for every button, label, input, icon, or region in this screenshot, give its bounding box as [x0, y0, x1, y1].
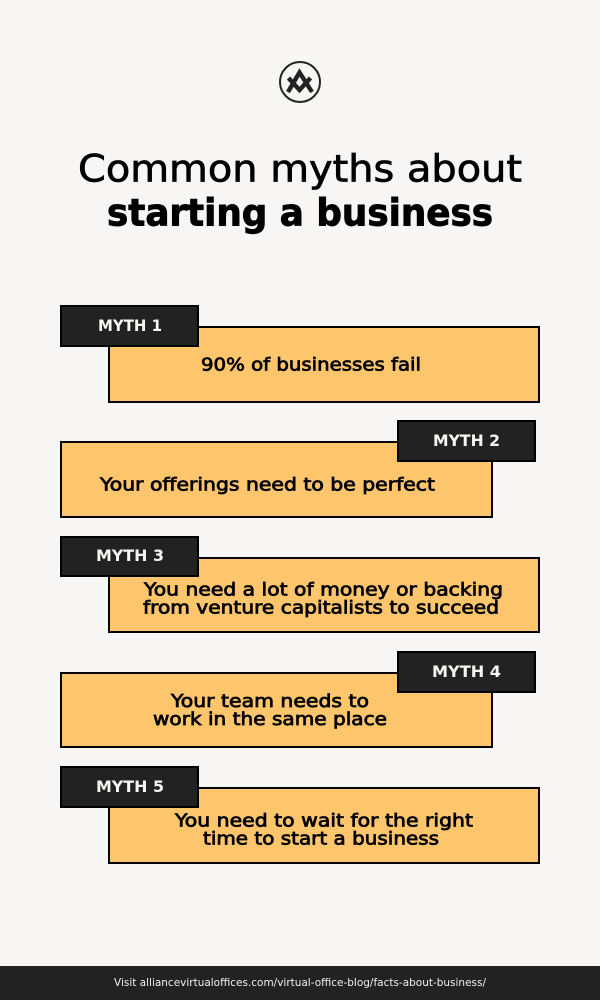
myth 2 text: Your offerings need to be perfect [99, 474, 435, 496]
myth 3 text: You need a lot of money or backing [143, 580, 503, 600]
myth 4 statement box [61, 673, 492, 747]
myth 1 label: MYTH 1 [98, 316, 162, 335]
myth 3 label: MYTH 3 [96, 546, 164, 565]
myth 1 statement box [109, 327, 539, 402]
title: Common myths about [78, 148, 522, 190]
myth 5 label: MYTH 5 [96, 777, 164, 796]
footer: Visit alliancevirtualoffices.com/virtual-office-blog/facts-about-business/ [114, 976, 486, 989]
footer [0, 966, 600, 1000]
myth 5 label [61, 767, 198, 807]
panel: myth 2 [61, 421, 535, 517]
icon: logo [280, 62, 320, 102]
myth 2 statement box [61, 442, 492, 517]
myth 3 text [143, 580, 503, 618]
myth 1 text: 90% of businesses fail [201, 354, 421, 376]
panel: myth 5 [61, 767, 539, 863]
myth 4 text: Your team needs to [170, 691, 369, 712]
myth 4 label [398, 652, 535, 692]
myth 5 text [174, 810, 473, 850]
myth 3 label [61, 537, 198, 576]
panel: myth 1 [61, 306, 539, 402]
myth 4 text: work in the same place [153, 709, 387, 730]
myth 2 label [398, 421, 535, 461]
myth 5 text: You need to wait for the right [174, 810, 473, 832]
myth 5 statement box [109, 788, 539, 863]
myth 3 statement box [109, 558, 539, 632]
myth 5 text: time to start a business [203, 828, 439, 850]
title: starting a business [107, 192, 493, 234]
panel: myth 4 [61, 652, 535, 747]
myth 4 text [153, 691, 387, 730]
myth 3 text: from venture capitalists to succeed [143, 598, 499, 618]
title [78, 148, 522, 234]
myth 4 label: MYTH 4 [432, 662, 501, 681]
myth 2 label: MYTH 2 [433, 431, 500, 450]
panel: myth 3 [61, 537, 539, 632]
myth 1 label [61, 306, 198, 346]
